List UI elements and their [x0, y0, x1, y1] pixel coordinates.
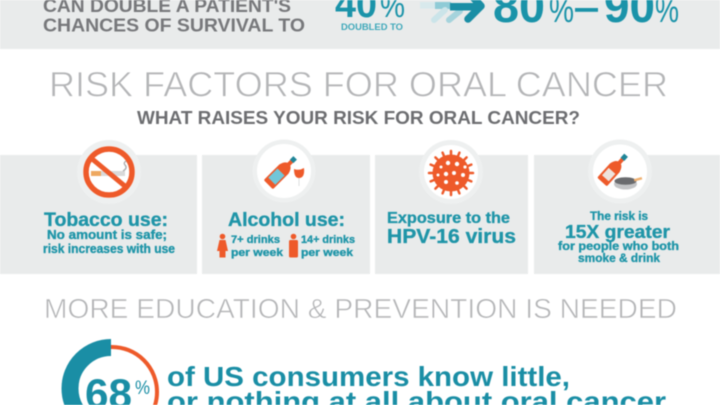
survival text: CHANCES OF SURVIVAL TO	[43, 16, 305, 36]
combined risk text: 15X greater	[565, 221, 670, 242]
panel: tobacco use	[0, 140, 197, 274]
consumer awareness text	[167, 361, 666, 405]
combined risk text: The risk is	[590, 211, 648, 223]
women drink limit: 7+ drinks	[231, 234, 280, 246]
tobacco text: No amount is safe;	[47, 228, 167, 242]
tobacco text: Tobacco use:	[44, 209, 168, 231]
men drink limit	[301, 234, 355, 259]
men drink limit: 14+ drinks	[301, 234, 355, 246]
stat: 40 percent: DOUBLED TO	[341, 22, 403, 33]
icon: arrow	[420, 0, 481, 20]
HPV text: HPV-16 virus	[387, 226, 516, 248]
women drink limit	[231, 234, 284, 259]
subheading: WHAT RAISES YOUR RISK FOR ORAL CANCER?	[137, 107, 580, 128]
icon: virus	[424, 145, 478, 199]
HPV text	[387, 210, 516, 248]
alcohol heading: Alcohol use:	[228, 209, 345, 231]
combined risk text	[558, 211, 679, 265]
heading: education and prevention: MORE EDUCATION & PREVENTION IS NEEDED	[44, 293, 677, 324]
HPV text: Exposure to the	[387, 210, 510, 227]
icon: man	[289, 234, 298, 258]
stat: 80 to 90 percent	[493, 0, 679, 32]
combined risk text: smoke & drink	[578, 253, 661, 265]
panel: alcohol use	[202, 140, 370, 274]
donut label: %	[135, 378, 150, 399]
combined risk text: for people who both	[558, 241, 679, 253]
panel: HPV-16	[375, 140, 528, 274]
panel: survival statistic band	[0, 0, 720, 49]
heading: risk factors: RISK FACTORS FOR ORAL CANCER	[49, 66, 668, 104]
women drink limit: per week	[231, 247, 284, 259]
icon: woman	[217, 234, 228, 258]
icon: no smoking	[83, 146, 135, 198]
tobacco text: risk increases with use	[43, 242, 175, 256]
icon: bottle and ashtray	[593, 144, 647, 198]
chart: 68 percent donut	[67, 347, 157, 405]
tobacco text	[43, 209, 175, 256]
icon: bottle and glass	[257, 144, 311, 198]
men drink limit: per week	[301, 247, 354, 259]
stat: 40 percent	[335, 0, 405, 33]
consumer awareness text: of US consumers know little,	[167, 361, 570, 392]
survival text	[43, 0, 305, 36]
panel: combined risk	[534, 140, 720, 274]
